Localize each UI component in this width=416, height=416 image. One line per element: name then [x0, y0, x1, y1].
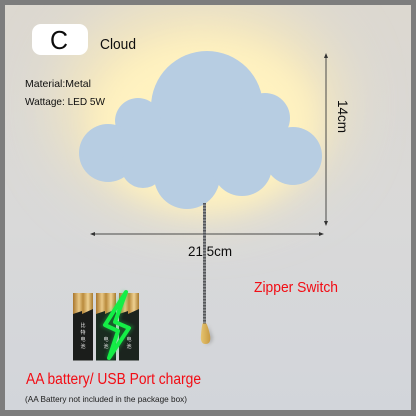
- text: material: Material:Metal: [25, 78, 91, 90]
- wooden pull handle: [204, 325, 213, 345]
- battery 3: 池: [126, 343, 132, 350]
- battery 2: [96, 293, 116, 360]
- battery 3: [119, 293, 139, 360]
- variant badge C: [32, 24, 88, 55]
- label: power options: AA battery/ USB Port charge: [26, 371, 201, 388]
- batteries icon: [73, 292, 139, 360]
- battery 1: 比: [80, 322, 86, 329]
- battery 3: 电: [126, 336, 132, 343]
- battery 2: 电: [103, 336, 109, 343]
- label: zipper switch: Zipper Switch: [254, 279, 338, 296]
- arrow: height dimension: [324, 53, 328, 226]
- cloud lamp: [79, 51, 322, 209]
- label: 21.5cm: 21.5cm: [188, 243, 232, 259]
- battery 2: 池: [103, 343, 109, 350]
- text: wattage: Wattage: LED 5W: [25, 96, 105, 108]
- icon: green lightning bolt: [105, 292, 129, 358]
- pull chain: [201, 203, 213, 345]
- battery 1: 电: [80, 336, 86, 343]
- battery 1: [73, 293, 93, 360]
- battery 1: 池: [80, 343, 86, 350]
- heading: Cloud: Cloud: [100, 37, 136, 53]
- label: 14cm: 14cm: [335, 100, 351, 133]
- note: battery not included: (AA Battery not included in the package box): [25, 394, 187, 404]
- arrow: width dimension: [90, 232, 324, 236]
- variant badge C: C: [50, 25, 68, 55]
- battery 1: 特: [80, 329, 86, 336]
